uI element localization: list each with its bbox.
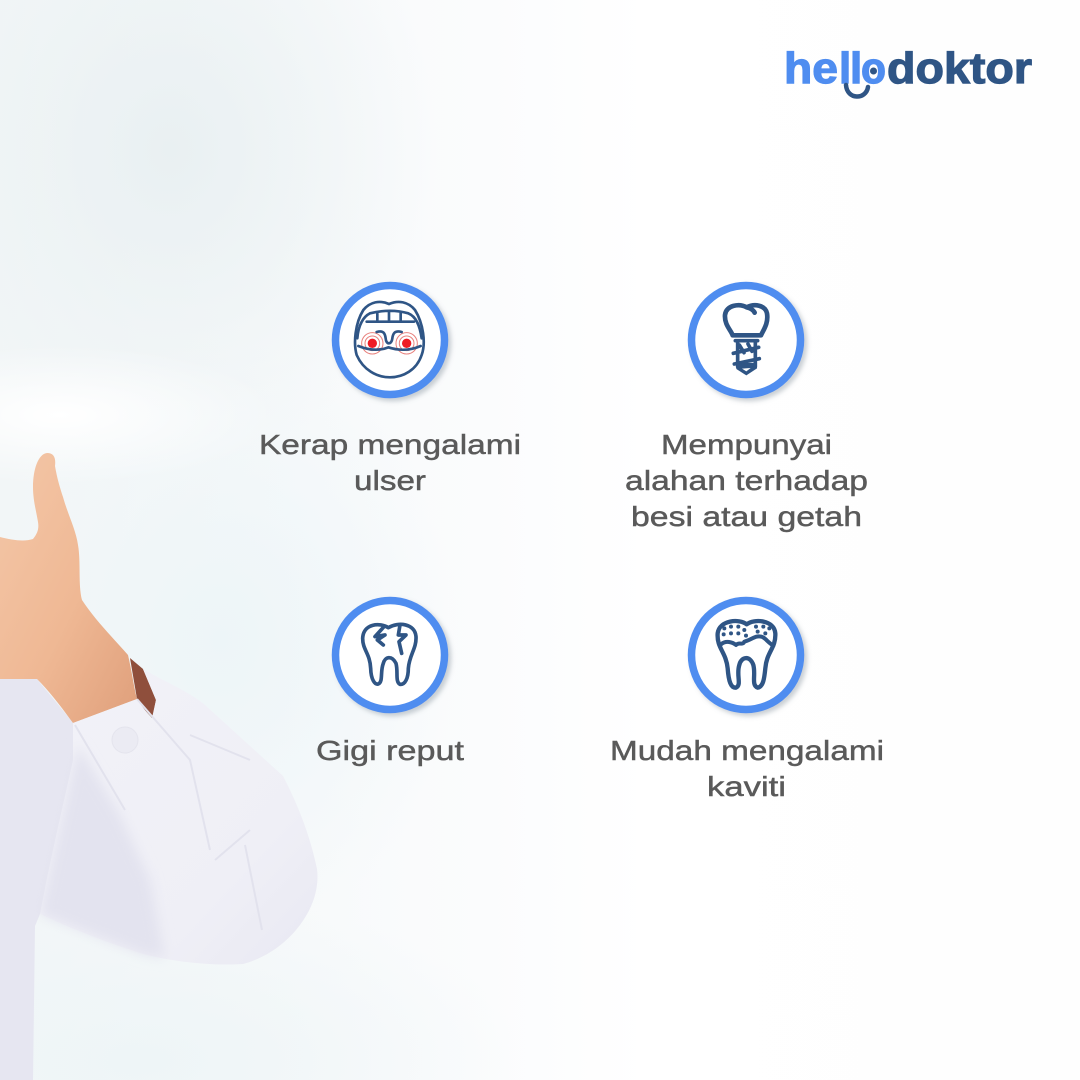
underarm shade [40, 745, 165, 958]
icon: dental implant [692, 286, 800, 394]
label: Kerap mengalami ulser [259, 429, 521, 496]
item: mouth ulcers [259, 286, 521, 496]
label: Mudah mengalami kaviti: Mudah mengalami [610, 735, 884, 766]
item: tooth decay [316, 600, 464, 766]
label: Mempunyai alahan terhadap besi atau getah: alahan terhadap [625, 465, 868, 496]
item: prone to cavities [610, 600, 884, 802]
sleeve folds [75, 699, 262, 930]
cuff button [112, 727, 138, 753]
label: Gigi reput: Gigi reput [316, 735, 464, 766]
icon: tooth with cavities [692, 600, 800, 710]
label: Kerap mengalami ulser: ulser [354, 465, 426, 496]
photo: doctor's hand with thumb up and white sleeve [0, 453, 317, 1080]
label: Mempunyai alahan terhadap besi atau getah: Mempunyai [661, 429, 832, 460]
logo letter: l: l [850, 44, 862, 93]
icon: cracked tooth [336, 600, 444, 710]
item: metal or latex allergy [625, 286, 868, 532]
sleeve [40, 669, 317, 965]
label: Mudah mengalami kaviti: kaviti [707, 771, 786, 802]
logo letter: o: o [861, 44, 886, 93]
logo word: doktor: doktor [887, 44, 1032, 93]
logo stethoscope [846, 68, 877, 97]
icon: mouth [336, 286, 444, 394]
label: Mempunyai alahan terhadap besi atau getah: besi atau getah [631, 501, 862, 532]
label: Kerap mengalami ulser: Kerap mengalami [259, 429, 521, 460]
hand and thumb [0, 453, 137, 723]
inner cuff shadow [130, 658, 156, 718]
logo letter: l: l [839, 44, 851, 93]
logo word: he: he [784, 44, 838, 93]
label: Mempunyai alahan terhadap besi atau getah [625, 429, 868, 532]
shirt body [0, 679, 150, 1080]
label: Mudah mengalami kaviti [610, 735, 884, 802]
logo: hellodoktor [784, 44, 1032, 97]
